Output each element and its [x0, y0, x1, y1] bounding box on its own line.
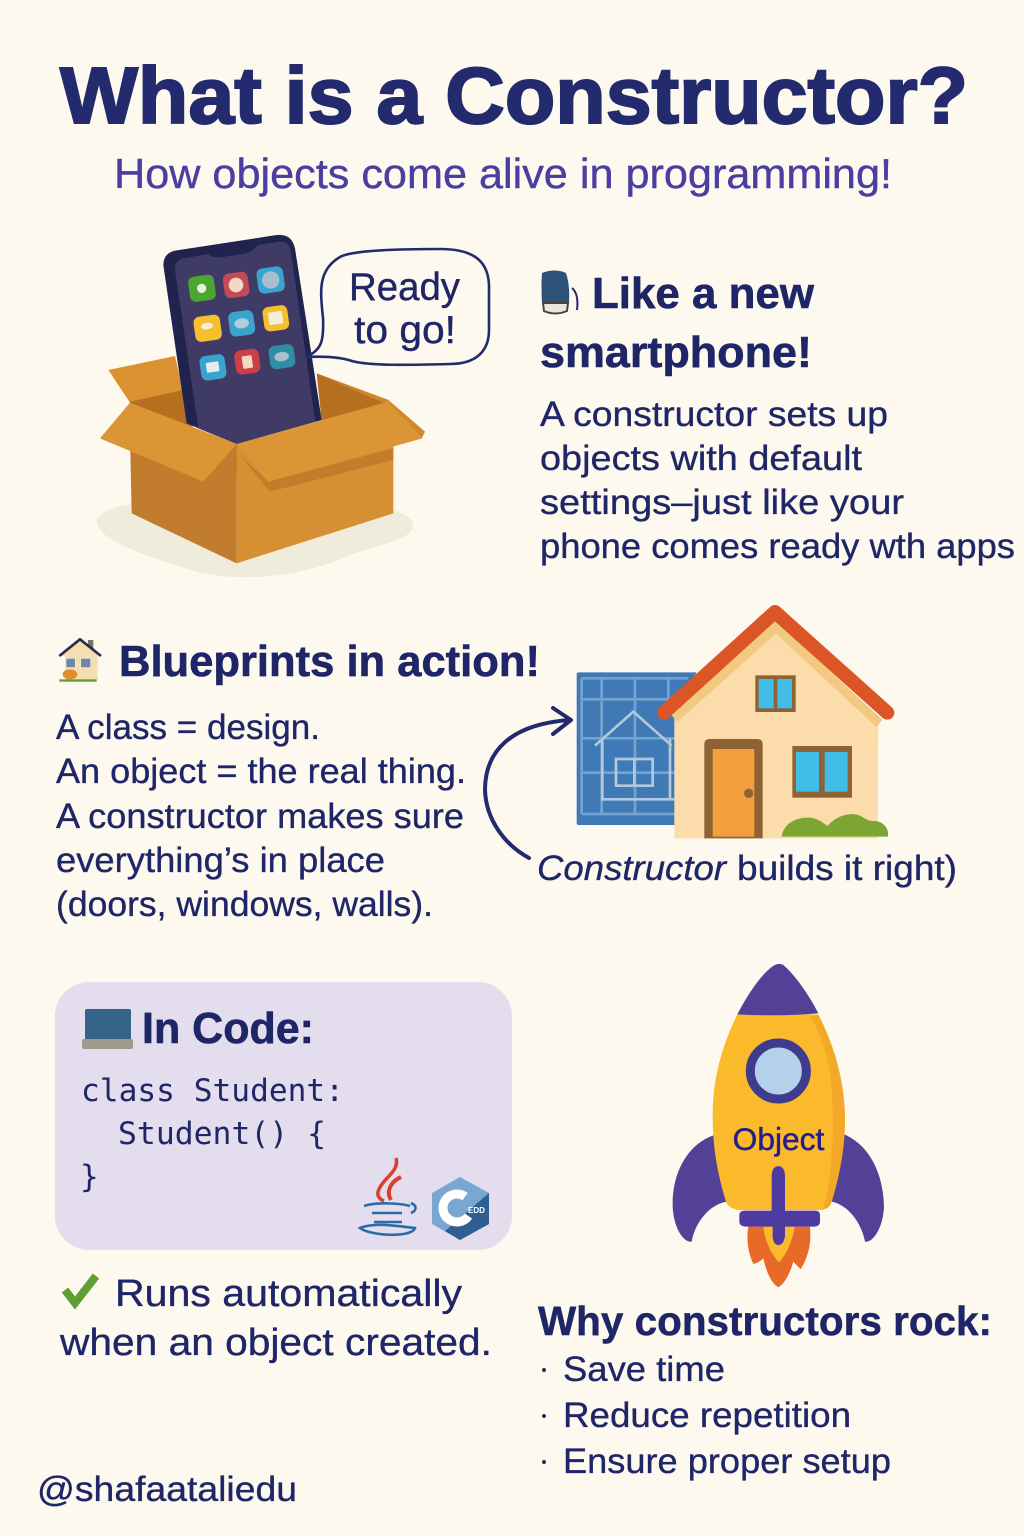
heading: blueprints in action: Blueprints in action!: [119, 637, 540, 686]
arrow: constructor to blueprint: [485, 708, 571, 858]
text block: blueprint explanation: (doors, windows, walls).: [56, 885, 433, 924]
subtitle: How objects come alive in programming!: [114, 150, 892, 197]
house: [664, 612, 888, 838]
flame: [747, 1227, 810, 1287]
text block: blueprint explanation: A constructor makes sure: [56, 797, 464, 836]
text block: runs automatically: [59, 1273, 492, 1364]
list: benefits: [542, 1350, 891, 1481]
speech bubble: Ready to go!: Ready: [349, 266, 460, 309]
icon: C++ logo: [432, 1177, 489, 1240]
list: benefits: Ensure proper setup: [563, 1442, 891, 1481]
title: What is a Constructor?: [60, 51, 968, 140]
text block: blueprint explanation: An object = the real thing.: [56, 752, 466, 791]
text block: runs automatically: Runs automatically: [115, 1273, 462, 1315]
text block: blueprint explanation: A class = design.: [56, 708, 320, 747]
blueprint sheet: [577, 672, 697, 825]
code sample: class Student:: [81, 1073, 344, 1109]
icon: java logo: [360, 1158, 416, 1235]
speech bubble: Ready to go!: [306, 249, 489, 365]
text block: blueprint explanation: [56, 708, 466, 924]
text block: smartphone explanation: phone comes ready wth apps: [540, 527, 1015, 566]
caption: constructor builds it right: builds it right): [737, 849, 957, 888]
illustration: rocket: [673, 964, 884, 1287]
illustration: blueprint and house: [577, 612, 888, 838]
icon: C++ logo: EDD: [468, 1206, 485, 1215]
list: benefits: Reduce repetition: [563, 1396, 851, 1435]
icon: check mark: [65, 1276, 96, 1303]
fins: [673, 1135, 727, 1242]
icon: phone emoji: [542, 270, 577, 314]
heading: like a new smartphone: Like a new: [592, 269, 815, 318]
nozzle and centre fin: [739, 1166, 820, 1245]
heading: like a new smartphone: [540, 269, 815, 377]
porthole: [750, 1043, 806, 1099]
code sample: Student() {: [118, 1116, 326, 1152]
text block: smartphone explanation: settings–just like your: [540, 483, 904, 522]
icon: house emoji: [59, 639, 101, 682]
text block: smartphone explanation: [540, 395, 1015, 566]
text block: blueprint explanation: everything’s in place: [56, 841, 385, 880]
speech bubble: Ready to go!: to go!: [354, 309, 456, 352]
text block: smartphone explanation: A constructor sets up: [540, 395, 888, 434]
illustration: smartphone in a box: [97, 235, 425, 577]
caption: constructor builds it right: Constructor: [537, 849, 727, 888]
nose cone: [737, 964, 818, 1015]
code sample: }: [80, 1159, 99, 1195]
icon: laptop: [82, 1009, 133, 1049]
heading: why constructors rock: Why constructors rock:: [538, 1298, 992, 1344]
list: benefits: Save time: [563, 1350, 725, 1389]
body: [713, 1014, 845, 1210]
heading: in code: In Code:: [142, 1004, 314, 1053]
panel: in code: [55, 982, 512, 1250]
heading: like a new smartphone: smartphone!: [540, 328, 812, 377]
caption: constructor builds it right: [537, 849, 957, 888]
text block: runs automatically: when an object created.: [59, 1322, 492, 1364]
code sample: [80, 1073, 344, 1195]
author handle: @shafaataliedu: [37, 1470, 297, 1509]
object label: Object: [733, 1121, 825, 1157]
text block: smartphone explanation: objects with default: [540, 439, 862, 478]
